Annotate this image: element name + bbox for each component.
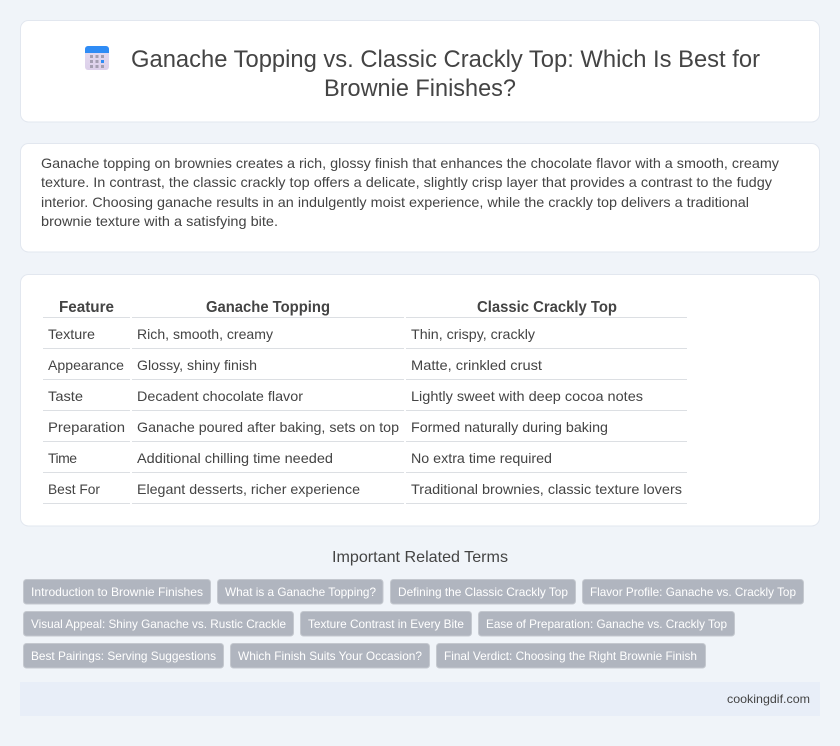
row: preparation: Ganache poured after baking, sets on top	[137, 419, 399, 435]
panel: comparison table	[20, 274, 820, 526]
row: best for	[48, 481, 682, 497]
row: preparation	[48, 419, 608, 435]
table header: Classic Crackly Top	[477, 299, 617, 316]
related term tags: What is a Ganache Topping?	[225, 585, 376, 599]
row: taste	[48, 388, 643, 404]
table rules	[43, 318, 687, 504]
panel: title header	[20, 20, 820, 122]
title: Ganache Topping vs. Classic Crackly Top: Which Is Best for	[131, 46, 760, 73]
related term tags: Ease of Preparation: Ganache vs. Crackly Top	[486, 617, 727, 631]
row: appearance: Matte, crinkled crust	[411, 357, 542, 373]
related term tags: Texture Contrast in Every Bite	[308, 617, 464, 631]
row: time: Time	[48, 450, 77, 466]
row: preparation: Preparation	[48, 419, 125, 435]
row: appearance	[48, 357, 542, 373]
row: appearance: Appearance	[48, 357, 124, 373]
title	[131, 46, 760, 102]
table header: Ganache Topping	[206, 299, 330, 316]
row: best for: Traditional brownies, classic texture lovers	[411, 481, 682, 497]
heading: related terms: Important Related Terms	[332, 549, 508, 566]
row: best for: Elegant desserts, richer experience	[137, 481, 360, 497]
row: taste: Lightly sweet with deep cocoa notes	[411, 388, 643, 404]
row: time: No extra time required	[411, 450, 552, 466]
table header: Feature	[59, 299, 114, 316]
text block: introduction	[41, 155, 779, 229]
related term tags: Which Finish Suits Your Occasion?	[238, 649, 422, 663]
row: texture: Thin, crispy, crackly	[411, 326, 535, 342]
text block: introduction: interior. Choosing ganache results in an indulgently moist experience, while the crackly top delivers a traditional	[41, 194, 749, 210]
related term tags: Final Verdict: Choosing the Right Brownie Finish	[444, 649, 697, 663]
related term tags: Visual Appeal: Shiny Ganache vs. Rustic Crackle	[31, 617, 286, 631]
row: time: Additional chilling time needed	[137, 450, 333, 466]
panel: introduction	[20, 144, 820, 252]
icon: calendar	[85, 46, 109, 70]
row: taste: Decadent chocolate flavor	[137, 388, 303, 404]
table header	[59, 299, 617, 316]
related term tags: Introduction to Brownie Finishes	[31, 585, 203, 599]
related term tags: Flavor Profile: Ganache vs. Crackly Top	[590, 585, 796, 599]
text block: introduction: Ganache topping on brownies creates a rich, glossy finish that enhances the chocolate flavor with a smooth, creamy	[41, 155, 779, 171]
row: time	[48, 450, 552, 466]
row: best for: Best For	[48, 481, 100, 497]
related term tags: Best Pairings: Serving Suggestions	[31, 649, 216, 663]
title: Brownie Finishes?	[324, 75, 516, 102]
row: appearance: Glossy, shiny finish	[137, 357, 257, 373]
footer bar	[20, 682, 820, 716]
row: taste: Taste	[48, 388, 83, 404]
text block: introduction: texture. In contrast, the classic crackly top offers a delicate, slightly crisp layer that provides a contrast to the fudgy	[41, 174, 772, 190]
footer bar: cookingdif.com	[727, 692, 810, 706]
row: texture	[48, 326, 535, 342]
row: texture: Rich, smooth, creamy	[137, 326, 273, 342]
row: preparation: Formed naturally during baking	[411, 419, 608, 435]
text block: introduction: brownie texture with a satisfying bite.	[41, 213, 278, 229]
row: texture: Texture	[48, 326, 95, 342]
related term tags	[24, 580, 804, 668]
related term tags: Defining the Classic Crackly Top	[398, 585, 568, 599]
